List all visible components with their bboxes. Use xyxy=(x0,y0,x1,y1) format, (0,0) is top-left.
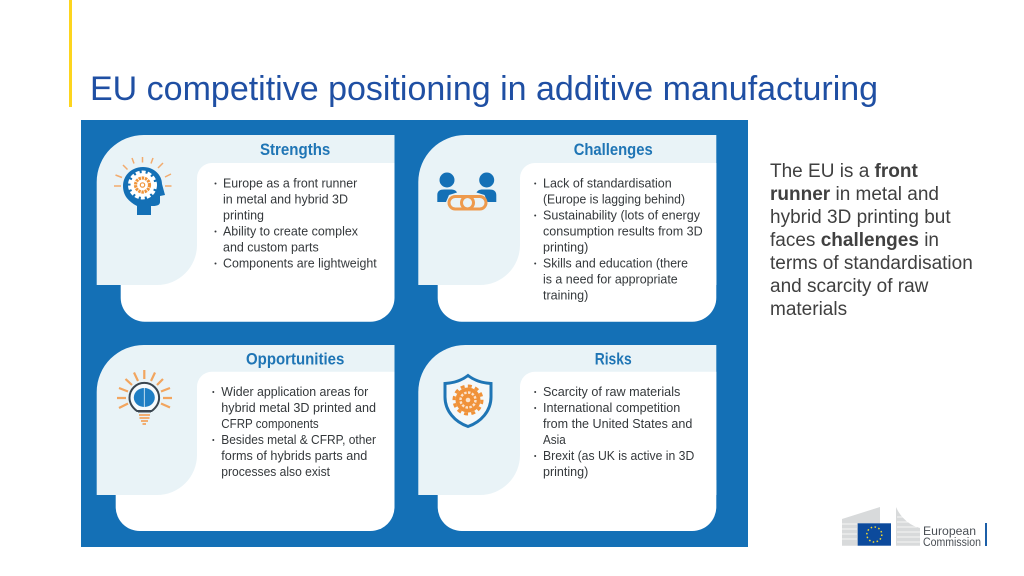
text: risks list: Brexit (as UK is active in 3D xyxy=(543,449,694,463)
text: risks list: from the United States and xyxy=(543,417,692,431)
icon: shield with gear xyxy=(445,376,491,426)
title: EU competitive positioning in additive manufacturing xyxy=(90,70,878,108)
building silhouette xyxy=(842,507,920,546)
text block: summary xyxy=(770,160,973,320)
text: strengths list: in metal and hybrid 3D xyxy=(223,192,348,206)
icon: light bulb with brain xyxy=(117,370,172,424)
text: strengths list: and custom parts xyxy=(223,240,319,254)
logo: European Commission xyxy=(842,507,987,549)
text: opportunities list xyxy=(212,385,376,479)
text: opportunities list: Wider application areas for xyxy=(221,385,368,399)
text block: summary: The EU is a front xyxy=(770,160,918,182)
logo bar xyxy=(985,523,987,546)
heading: opportunities: Opportunities xyxy=(246,350,344,368)
heading: challenges: Challenges xyxy=(574,140,653,159)
wordmark second line: Commission xyxy=(923,537,981,549)
text block: summary: runner in metal and xyxy=(770,184,939,204)
text: challenges list: training) xyxy=(543,288,588,302)
text: challenges list: (Europe is lagging behind) xyxy=(543,192,685,206)
panel: challenges xyxy=(418,135,716,322)
text: challenges list: is a need for appropriate xyxy=(543,272,678,286)
text: challenges list: Sustainability (lots of energy xyxy=(543,208,701,222)
text: risks list: printing) xyxy=(543,465,588,479)
text: risks list: Asia xyxy=(543,433,566,447)
text: opportunities list: forms of hybrids parts and xyxy=(221,449,367,463)
panel: risks xyxy=(418,345,716,531)
panel: strengths xyxy=(97,135,394,322)
yellow accent line xyxy=(69,0,72,107)
text: challenges list: printing) xyxy=(543,240,588,254)
text block: summary: terms of standardisation xyxy=(770,252,973,274)
text block: summary: materials xyxy=(770,298,847,320)
heading: risks: Risks xyxy=(595,350,632,368)
text: risks list: Scarcity of raw materials xyxy=(543,385,680,399)
icon: linked people xyxy=(437,172,496,209)
wordmark: European xyxy=(923,526,976,538)
heading: strengths: Strengths xyxy=(260,140,330,159)
text: strengths list: Ability to create complex xyxy=(223,224,359,238)
text: risks list: International competition xyxy=(543,401,680,415)
blue background panel xyxy=(81,120,748,547)
icon: head with gear xyxy=(114,157,172,215)
text: challenges list: Skills and education (there xyxy=(543,256,688,270)
text block: summary: hybrid 3D printing but xyxy=(770,206,951,228)
text: strengths list: printing xyxy=(223,208,264,222)
text block: summary: and scarcity of raw xyxy=(770,276,928,296)
text: opportunities list: CFRP components xyxy=(221,417,319,431)
text: strengths list: Europe as a front runner xyxy=(223,176,357,190)
text: opportunities list: hybrid metal 3D printed and xyxy=(221,401,376,415)
text: challenges list: Lack of standardisation xyxy=(543,176,672,190)
text: opportunities list: processes also exist xyxy=(221,465,330,479)
EU flag xyxy=(858,523,891,546)
text: challenges list xyxy=(534,176,703,302)
text: opportunities list: Besides metal & CFRP, other xyxy=(221,433,376,447)
text: strengths list xyxy=(214,176,377,270)
text: challenges list: consumption results from 3D xyxy=(543,224,703,238)
text: strengths list: Components are lightweight xyxy=(223,256,377,270)
text: risks list xyxy=(534,385,694,479)
text block: summary: faces challenges in xyxy=(770,230,939,250)
panel: opportunities xyxy=(97,345,394,531)
